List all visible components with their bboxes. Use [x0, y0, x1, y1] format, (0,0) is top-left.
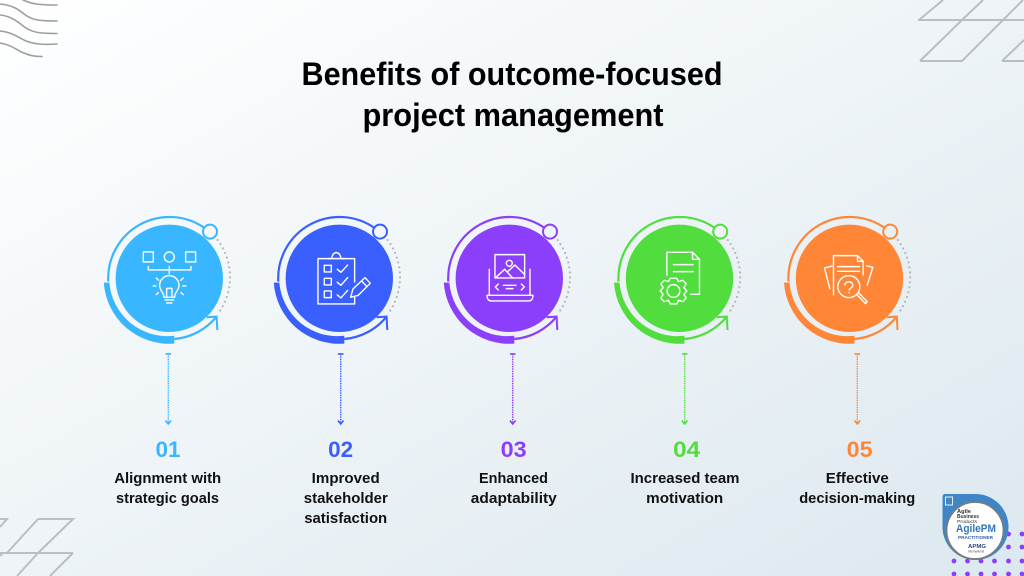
- label 2: stakeholder: [304, 490, 388, 507]
- circle icon 3: laptop with image and code: [444, 217, 570, 344]
- number 01: 01: [156, 437, 180, 462]
- label 5: Effective: [826, 470, 889, 487]
- connector arrow 1: [166, 354, 171, 424]
- number 03: 03: [501, 437, 527, 462]
- number 05: 05: [847, 437, 873, 462]
- badge: AgilePM Practitioner: Products: [957, 519, 978, 525]
- number 04: 04: [673, 437, 701, 462]
- badge: AgilePM Practitioner: PRACTITIONER: [958, 535, 994, 541]
- circle icon 2: clipboard checklist and pencil: [274, 217, 400, 344]
- step 2: improved stakeholder satisfaction: [274, 217, 400, 527]
- label 1: [114, 470, 221, 507]
- badge: AgilePM Practitioner: Business: [957, 514, 979, 520]
- title: project management: [362, 97, 664, 133]
- label 4: Increased team: [630, 470, 740, 487]
- connector arrow 3: [510, 354, 516, 424]
- number 02: 02: [328, 437, 353, 462]
- title: [302, 56, 722, 133]
- connector arrow 5: [854, 354, 860, 424]
- circle icon 4: document with gear: [614, 217, 740, 344]
- label 2: Improved: [312, 470, 380, 487]
- badge: AgilePM Practitioner: Agile: [957, 509, 971, 515]
- label 1: strategic goals: [116, 490, 219, 507]
- connector arrow 4: [682, 354, 688, 424]
- circle icon 5: documents with magnifier: [784, 217, 910, 344]
- step 1: alignment with strategic goals: [104, 217, 230, 507]
- label 4: [630, 470, 740, 507]
- label 5: [799, 470, 915, 507]
- decoration: parallelogram grid bottom left: [0, 519, 73, 576]
- badge: AgilePM Practitioner: APMG: [968, 544, 986, 550]
- decoration: purple dot grid bottom right: [952, 532, 1024, 576]
- step 4: increased team motivation: [614, 217, 740, 507]
- label 3: Enhanced: [479, 470, 548, 487]
- circle icon 1: org chart and light bulb: [104, 217, 230, 344]
- title: Benefits of outcome-focused: [302, 56, 722, 92]
- label 2: satisfaction: [304, 510, 387, 527]
- badge: AgilePM Practitioner: [942, 494, 1009, 560]
- step 5: effective decision-making: [784, 217, 915, 507]
- label 3: adaptability: [471, 490, 557, 507]
- decoration: wavy lines top left: [0, 0, 57, 56]
- connector arrow 2: [338, 354, 344, 424]
- label 3: [471, 470, 557, 507]
- label 5: decision-making: [799, 490, 915, 507]
- badge: AgilePM Practitioner: AgilePM: [956, 523, 996, 535]
- label 1: Alignment with: [114, 470, 221, 487]
- step 3: enhanced adaptability: [444, 217, 570, 507]
- badge: AgilePM Practitioner: International: [968, 550, 984, 554]
- label 2: [304, 470, 388, 527]
- decoration: parallelogram grid top right: [918, 0, 1024, 61]
- label 4: motivation: [646, 490, 723, 507]
